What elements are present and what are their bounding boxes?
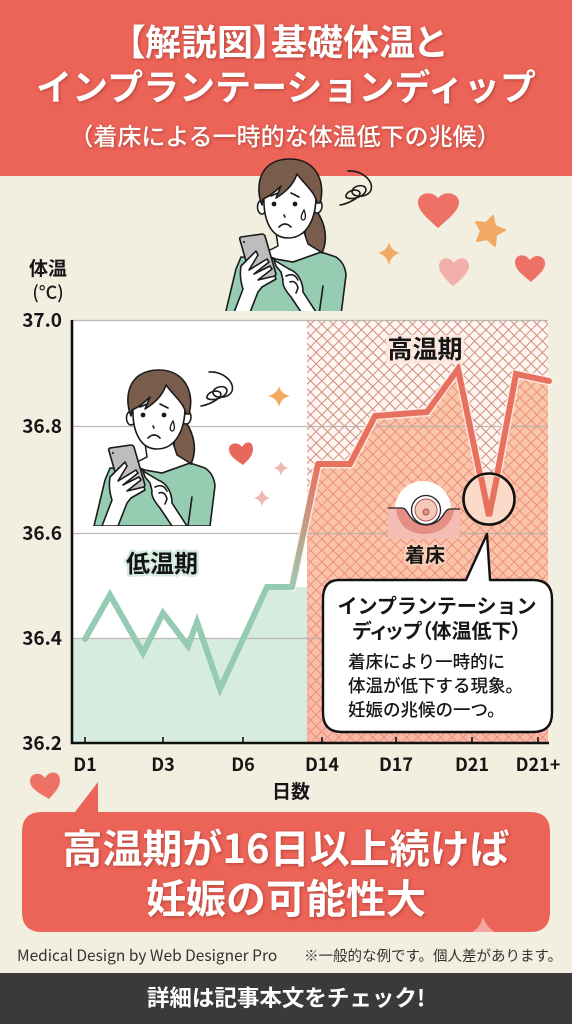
y axis title xyxy=(29,254,67,305)
low temperature area xyxy=(72,587,307,743)
chart: basal body temperature xyxy=(72,320,549,743)
y axis title: (°C) xyxy=(32,279,64,305)
y axis labels xyxy=(22,306,62,756)
callout: implantation dip: 着床により一時的に xyxy=(348,649,505,674)
label: implantation: 着床 xyxy=(405,539,445,568)
y axis labels: 36.6 xyxy=(22,519,62,546)
subtitle: （着床による一時的な体温低下の兆候） xyxy=(69,117,501,152)
bottom bar xyxy=(0,973,572,1024)
icon: dizzy swirl (top) xyxy=(340,171,371,205)
callout: implantation dip: 体温が低下する現象。 xyxy=(348,673,523,698)
callout: conclusion: 高温期が16日以上続けば xyxy=(62,817,510,875)
bottom bar: 詳細は記事本文をチェック! xyxy=(147,981,425,1013)
footer note: ※一般的な例です。個人差があります。 xyxy=(304,945,562,966)
icon: sparkle orange (chart) xyxy=(268,386,290,407)
x axis labels: D1 xyxy=(73,751,97,777)
plot background xyxy=(72,320,548,743)
icon: sparkle pale small xyxy=(274,461,288,476)
dip marker circle xyxy=(464,474,514,524)
title: インプランテーションディップ xyxy=(36,59,536,111)
label: high temperature phase: 高温期 xyxy=(387,330,463,366)
illustration: worried woman with phone (in chart) xyxy=(94,370,215,526)
callout: conclusion xyxy=(22,782,550,932)
y axis labels: 37.0 xyxy=(22,306,62,333)
callout: conclusion: 妊娠の可能性大 xyxy=(146,867,426,925)
grid lines xyxy=(72,320,548,638)
title: 【解説図】基礎体温と xyxy=(127,14,445,66)
illustration: worried woman with phone (top) xyxy=(225,159,346,315)
y axis title: 体温 xyxy=(29,254,67,281)
icon: implantation cross-section xyxy=(388,481,460,539)
icon: sparkle pale xyxy=(254,489,270,507)
label: low temperature phase: 低温期 xyxy=(126,544,198,579)
title xyxy=(36,14,536,111)
icon: heart small right xyxy=(515,255,545,282)
x axis labels: D17 xyxy=(379,751,413,777)
x axis labels: D6 xyxy=(231,751,255,777)
icon: heart pale xyxy=(439,258,469,286)
icon: heart bottom left xyxy=(30,772,60,799)
callout: implantation dip: 妊娠の兆候の一つ。 xyxy=(348,697,505,722)
x axis labels: D3 xyxy=(151,751,175,777)
x axis labels xyxy=(73,751,560,777)
icon: dizzy swirl (chart) xyxy=(201,372,232,406)
icon: heart large xyxy=(418,193,459,228)
icon: sparkle orange xyxy=(378,242,400,265)
header banner xyxy=(0,0,572,176)
x axis labels: D21+ xyxy=(516,751,560,777)
y axis labels: 36.2 xyxy=(22,729,62,756)
axes xyxy=(72,320,549,743)
x axis labels: D21 xyxy=(455,751,489,777)
icon: heart (chart) xyxy=(229,442,253,465)
x axis title: 日数 xyxy=(272,777,310,804)
callout: implantation dip: ディップ（体温低下） xyxy=(353,615,521,644)
high temperature hatch zone xyxy=(307,320,548,743)
y axis labels: 36.8 xyxy=(22,412,62,439)
callout: implantation dip: インプランテーション xyxy=(338,590,536,619)
y axis labels: 36.4 xyxy=(22,624,62,651)
x axis labels: D14 xyxy=(305,751,339,777)
footer credit: Medical Design by Web Designer Pro xyxy=(17,944,277,966)
temperature line xyxy=(85,369,549,689)
callout: implantation dip xyxy=(323,534,552,732)
icon: star xyxy=(476,216,505,246)
